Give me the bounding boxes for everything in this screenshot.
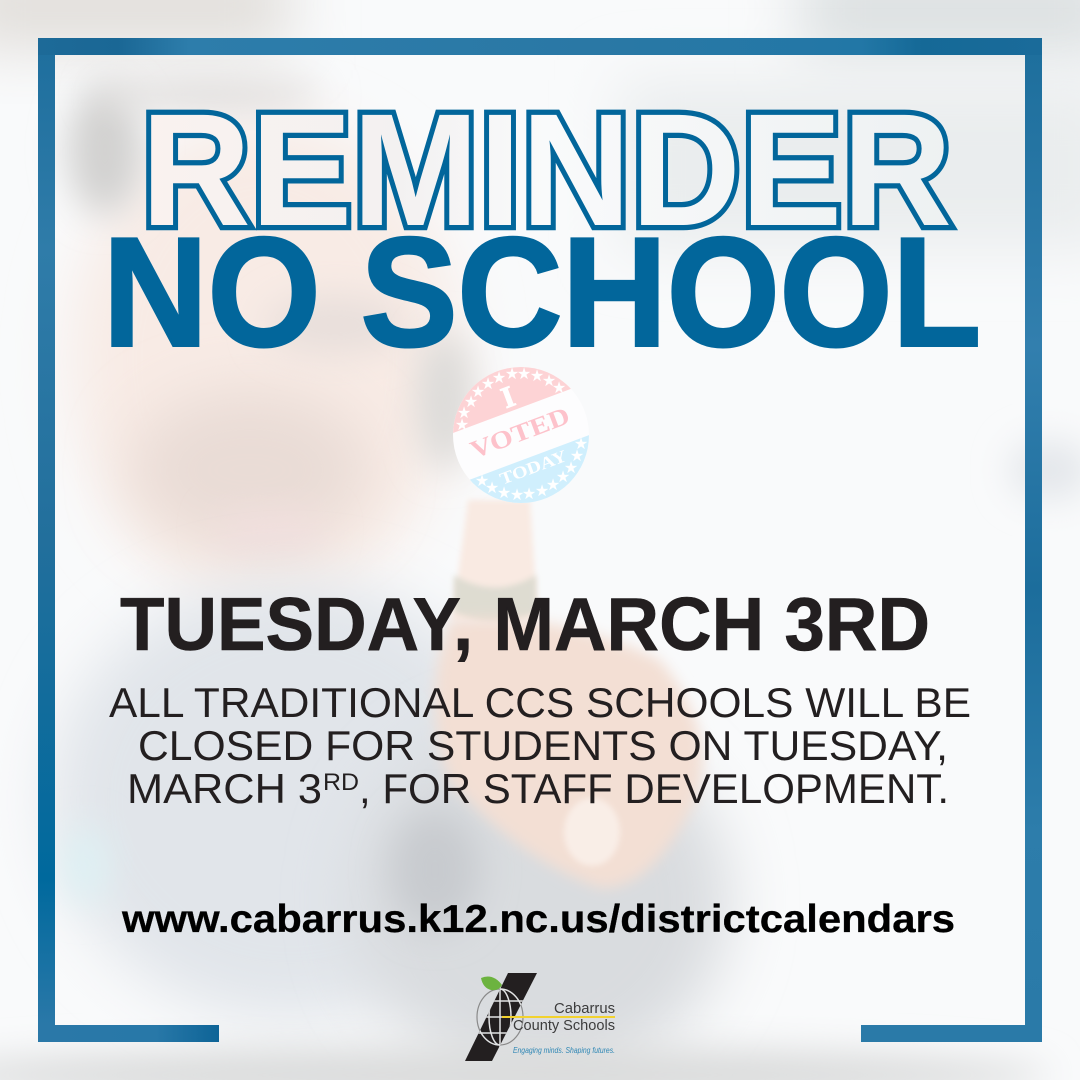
icon: I voted today sticker: ★ <box>574 434 588 453</box>
icon: I voted today sticker: ★ <box>552 378 566 397</box>
icon: I voted today sticker: ★ <box>471 382 485 401</box>
icon: I voted today sticker: ★ <box>457 403 471 422</box>
icon: I voted today sticker: VOTED <box>467 403 574 464</box>
title: reminder: REMINDER <box>141 80 952 259</box>
body text: RD <box>323 769 359 796</box>
body text <box>109 679 971 812</box>
icon: I voted today sticker: TODAY <box>497 446 569 489</box>
icon: I voted today sticker: ★ <box>564 458 578 477</box>
icon: I voted today sticker: ★ <box>481 374 495 393</box>
body text: MARCH 3 <box>127 765 322 812</box>
icon: I voted today sticker: ★ <box>522 484 536 503</box>
finger and hand <box>435 500 702 888</box>
body text: CLOSED FOR STUDENTS ON TUESDAY, <box>138 722 948 769</box>
icon: I voted today sticker: ★ <box>455 415 469 434</box>
icon: I voted today sticker: ★ <box>497 483 511 502</box>
icon: I voted today sticker: ★ <box>492 368 506 387</box>
title: no school: NO SCHOOL <box>103 206 981 378</box>
icon: I voted today sticker <box>453 367 589 503</box>
logo: Cabarrus County Schools <box>465 973 615 1061</box>
icon: I voted today sticker: ★ <box>570 446 584 465</box>
body text: ALL TRADITIONAL CCS SCHOOLS WILL BE <box>109 679 971 726</box>
logo: Cabarrus County Schools: County Schools <box>513 1017 615 1034</box>
title: reminder: REMINDER <box>141 80 952 259</box>
icon: I voted today sticker: ★ <box>475 471 489 490</box>
date heading: TUESDAY, MARCH 3RD <box>120 582 930 666</box>
icon: I voted today sticker: ★ <box>535 481 549 500</box>
website link: www.cabarrus.k12.nc.us/districtcalendars <box>121 898 955 941</box>
body text: , FOR STAFF DEVELOPMENT. <box>359 765 949 812</box>
icon: I voted today sticker: ★ <box>542 371 556 390</box>
icon: I voted today sticker: ★ <box>530 366 544 385</box>
icon: I voted today sticker: I <box>497 380 519 415</box>
logo: Cabarrus County Schools: Cabarrus <box>554 1000 615 1017</box>
icon: I voted today sticker: ★ <box>505 364 519 383</box>
icon: I voted today sticker: ★ <box>556 467 570 486</box>
icon: I voted today sticker: ★ <box>485 478 499 497</box>
icon: I voted today sticker: ★ <box>546 475 560 494</box>
icon: I voted today sticker: ★ <box>510 485 524 504</box>
icon: I voted today sticker: ★ <box>464 392 478 411</box>
icon: I voted today sticker: ★ <box>517 364 531 383</box>
logo: Cabarrus County Schools: Engaging minds. Shaping futures. <box>513 1046 615 1055</box>
